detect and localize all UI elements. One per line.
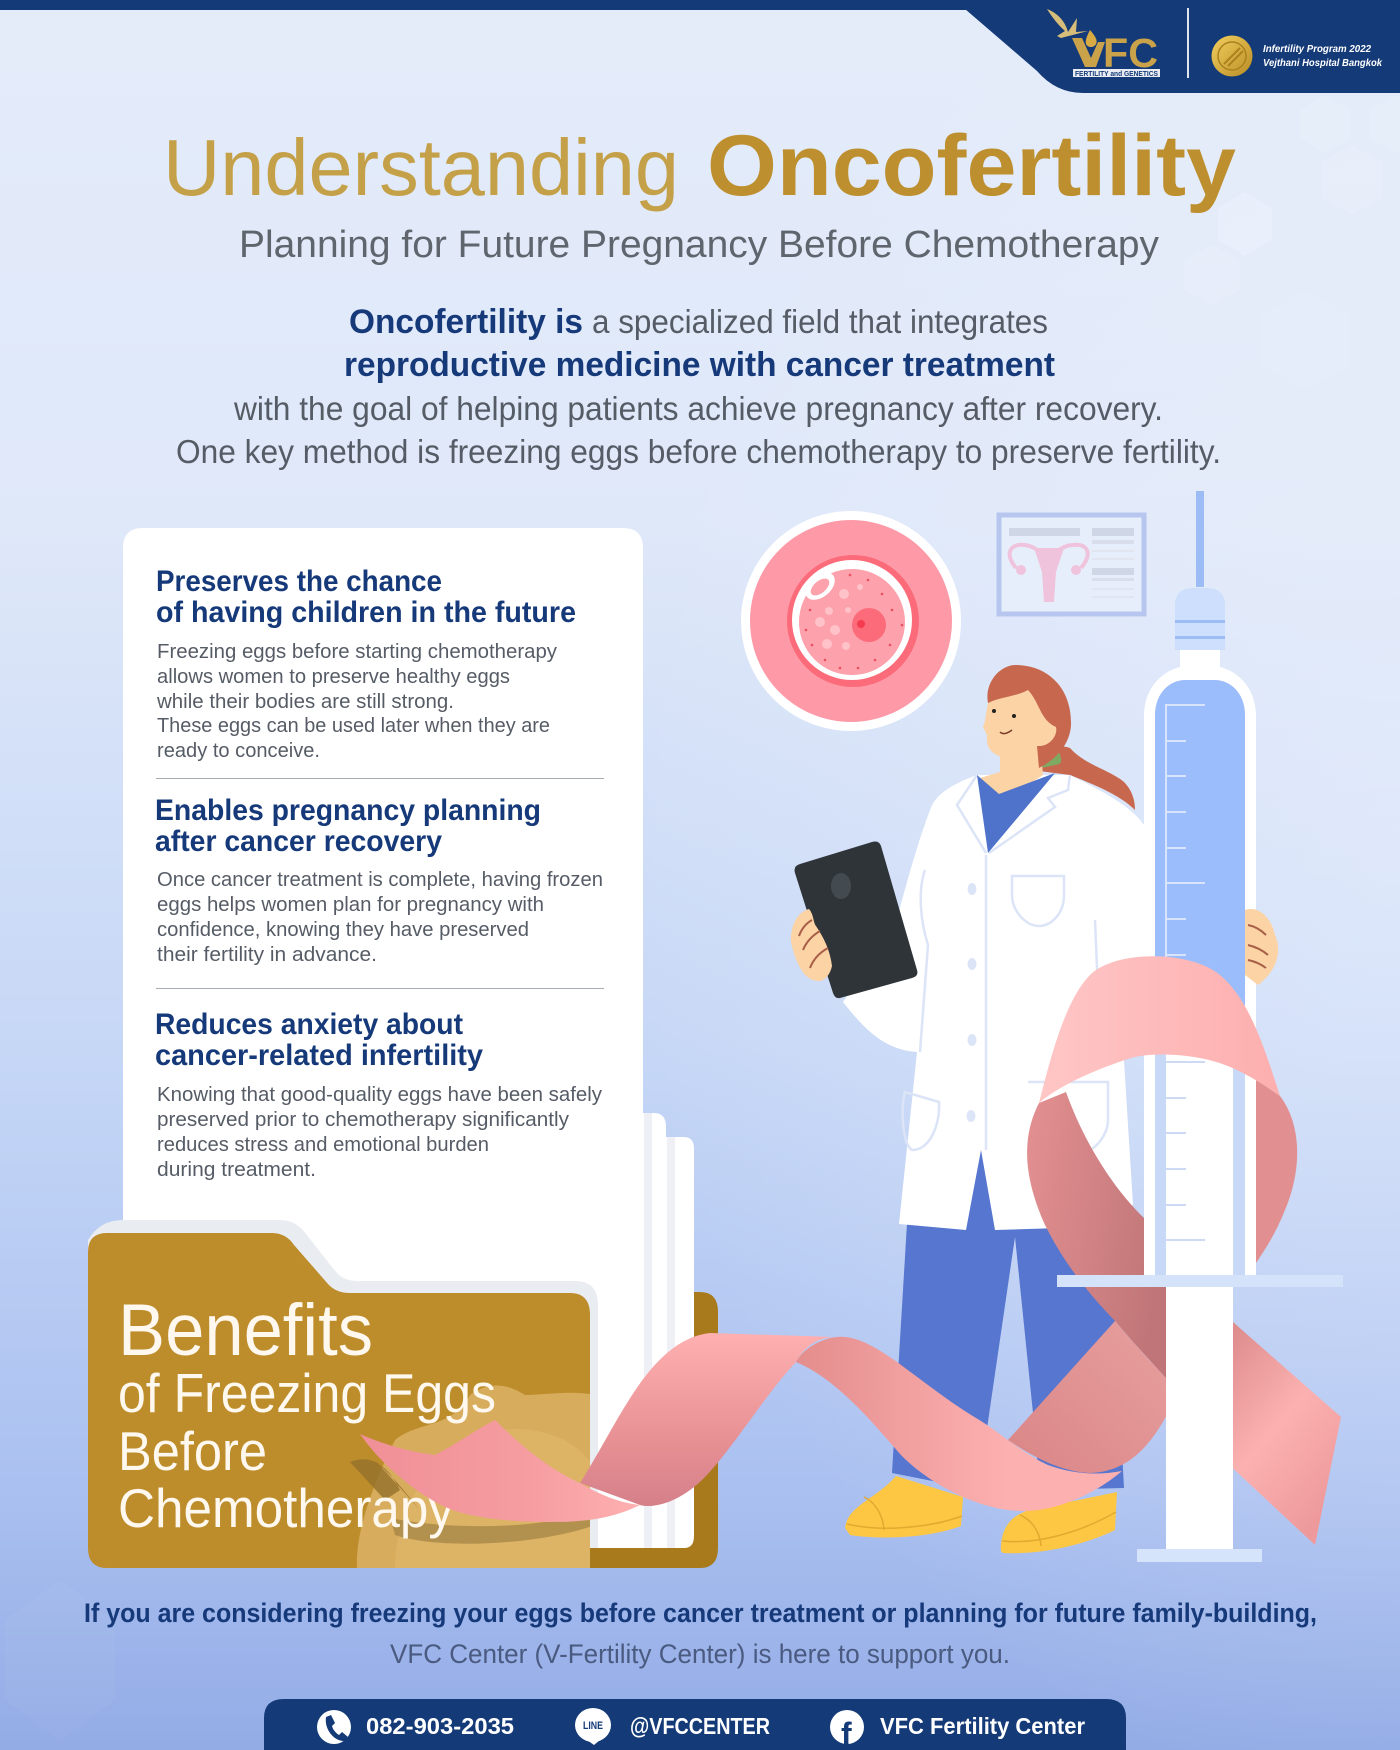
benefit 3: preserved prior to chemotherapy significantly [157,1108,570,1131]
header band with logos [0,0,1400,93]
folder: back panel and paper sheets [560,1113,718,1568]
intro paragraph: One key method is freezing eggs before chemotherapy to preserve fertility. [176,433,1221,470]
benefit 3: Reduces anxiety about [155,1008,463,1041]
LINE handle: @VFCCENTER [630,1713,770,1739]
folder: front panel with heading [88,1220,598,1568]
benefit 1: Preserves the chance [156,565,442,598]
doctor: hair [987,665,1071,768]
title [163,118,1236,214]
intro paragraph: Oncofertility is [349,303,583,341]
doctor: lab coat [843,775,1144,1230]
benefit 2: Once cancer treatment is complete, having frozen [157,868,603,891]
benefit 2: eggs helps women plan for pregnancy with [157,893,544,916]
doctor: tablet [795,842,917,998]
ribbon: lower bands and tails [360,1075,1341,1545]
closing message: VFC Center (V-Fertility Center) is here to support you. [390,1639,1010,1669]
icon: gold seal [1212,36,1252,76]
icon: uterus poster [999,515,1144,614]
icon: egg cell [741,511,961,731]
doctor: left hand [791,909,832,981]
benefit 3: Knowing that good-quality eggs have been safely [157,1083,603,1106]
folder heading text: Chemotherapy [118,1477,454,1539]
title: Oncofertility [707,118,1236,214]
benefit 1: Freezing eggs before starting chemotherapy [157,640,558,663]
icon: LINE [575,1708,611,1745]
icon: Facebook [830,1710,864,1750]
icon: VFC bird logo: FERTILITY and GENETICS [1075,71,1158,78]
benefit 1: These eggs can be used later when they are [157,714,550,737]
icon: VFC bird logo [1047,9,1160,78]
benefit 3: reduces stress and emotional burden [157,1133,489,1156]
benefit 2: Enables pregnancy planning [155,794,541,827]
contact bar [264,1699,1126,1750]
doctor: neck and scrubs [980,740,1043,800]
panel: benefits card [123,528,643,1548]
benefit 3: cancer-related infertility [155,1039,483,1072]
intro paragraph: a specialized field that integrates [592,303,1048,340]
folder heading text [118,1290,496,1539]
benefit 2: after cancer recovery [155,825,442,858]
benefit 1: while their bodies are still strong. [156,690,454,713]
title: Understanding [163,123,679,212]
folder heading text: Before [118,1420,267,1482]
accreditation text [1263,44,1382,69]
doctor: right hand [1245,909,1278,985]
icon: VFC bird logo: FC [1103,30,1158,76]
benefit 3 [155,1008,603,1181]
ribbon: top loop [1039,956,1280,1103]
doctor: face [983,680,1058,759]
closing message [84,1598,1317,1669]
intro paragraph: reproductive medicine with cancer treatment [344,346,1055,384]
benefit 3: during treatment. [157,1158,316,1181]
intro paragraph: with the goal of helping patients achieve pregnancy after recovery. [233,390,1163,427]
benefit 1: of having children in the future [156,596,576,629]
folder heading text: Benefits [118,1290,373,1371]
benefit 1: allows women to preserve healthy eggs [157,665,510,688]
folder heading text: of Freezing Eggs [118,1362,496,1424]
subtitle: Planning for Future Pregnancy Before Chemotherapy [239,224,1159,266]
benefit 2 [155,794,603,966]
syringe [1057,491,1343,1562]
icon: LINE: LINE [583,1720,603,1732]
closing message: If you are considering freezing your eggs before cancer treatment or planning for future family-building, [84,1598,1317,1628]
benefit 1 [156,565,576,762]
doctor: shoes [845,1476,1117,1553]
phone number: 082-903-2035 [366,1713,514,1739]
accreditation text: Vejthani Hospital Bangkok [1263,58,1382,69]
icon: phone [317,1710,351,1744]
Facebook name: VFC Fertility Center [880,1713,1085,1739]
benefit 2: their fertility in advance. [157,943,377,966]
benefit 1: ready to conceive. [157,739,320,762]
accreditation text: Infertility Program 2022 [1263,44,1371,55]
doctor illustration [791,665,1144,1553]
doctor: trousers [892,1140,1124,1490]
doctor: ponytail and hair back [1039,747,1135,810]
benefit 2: confidence, knowing they have preserved [157,918,529,941]
intro paragraph [176,303,1221,470]
